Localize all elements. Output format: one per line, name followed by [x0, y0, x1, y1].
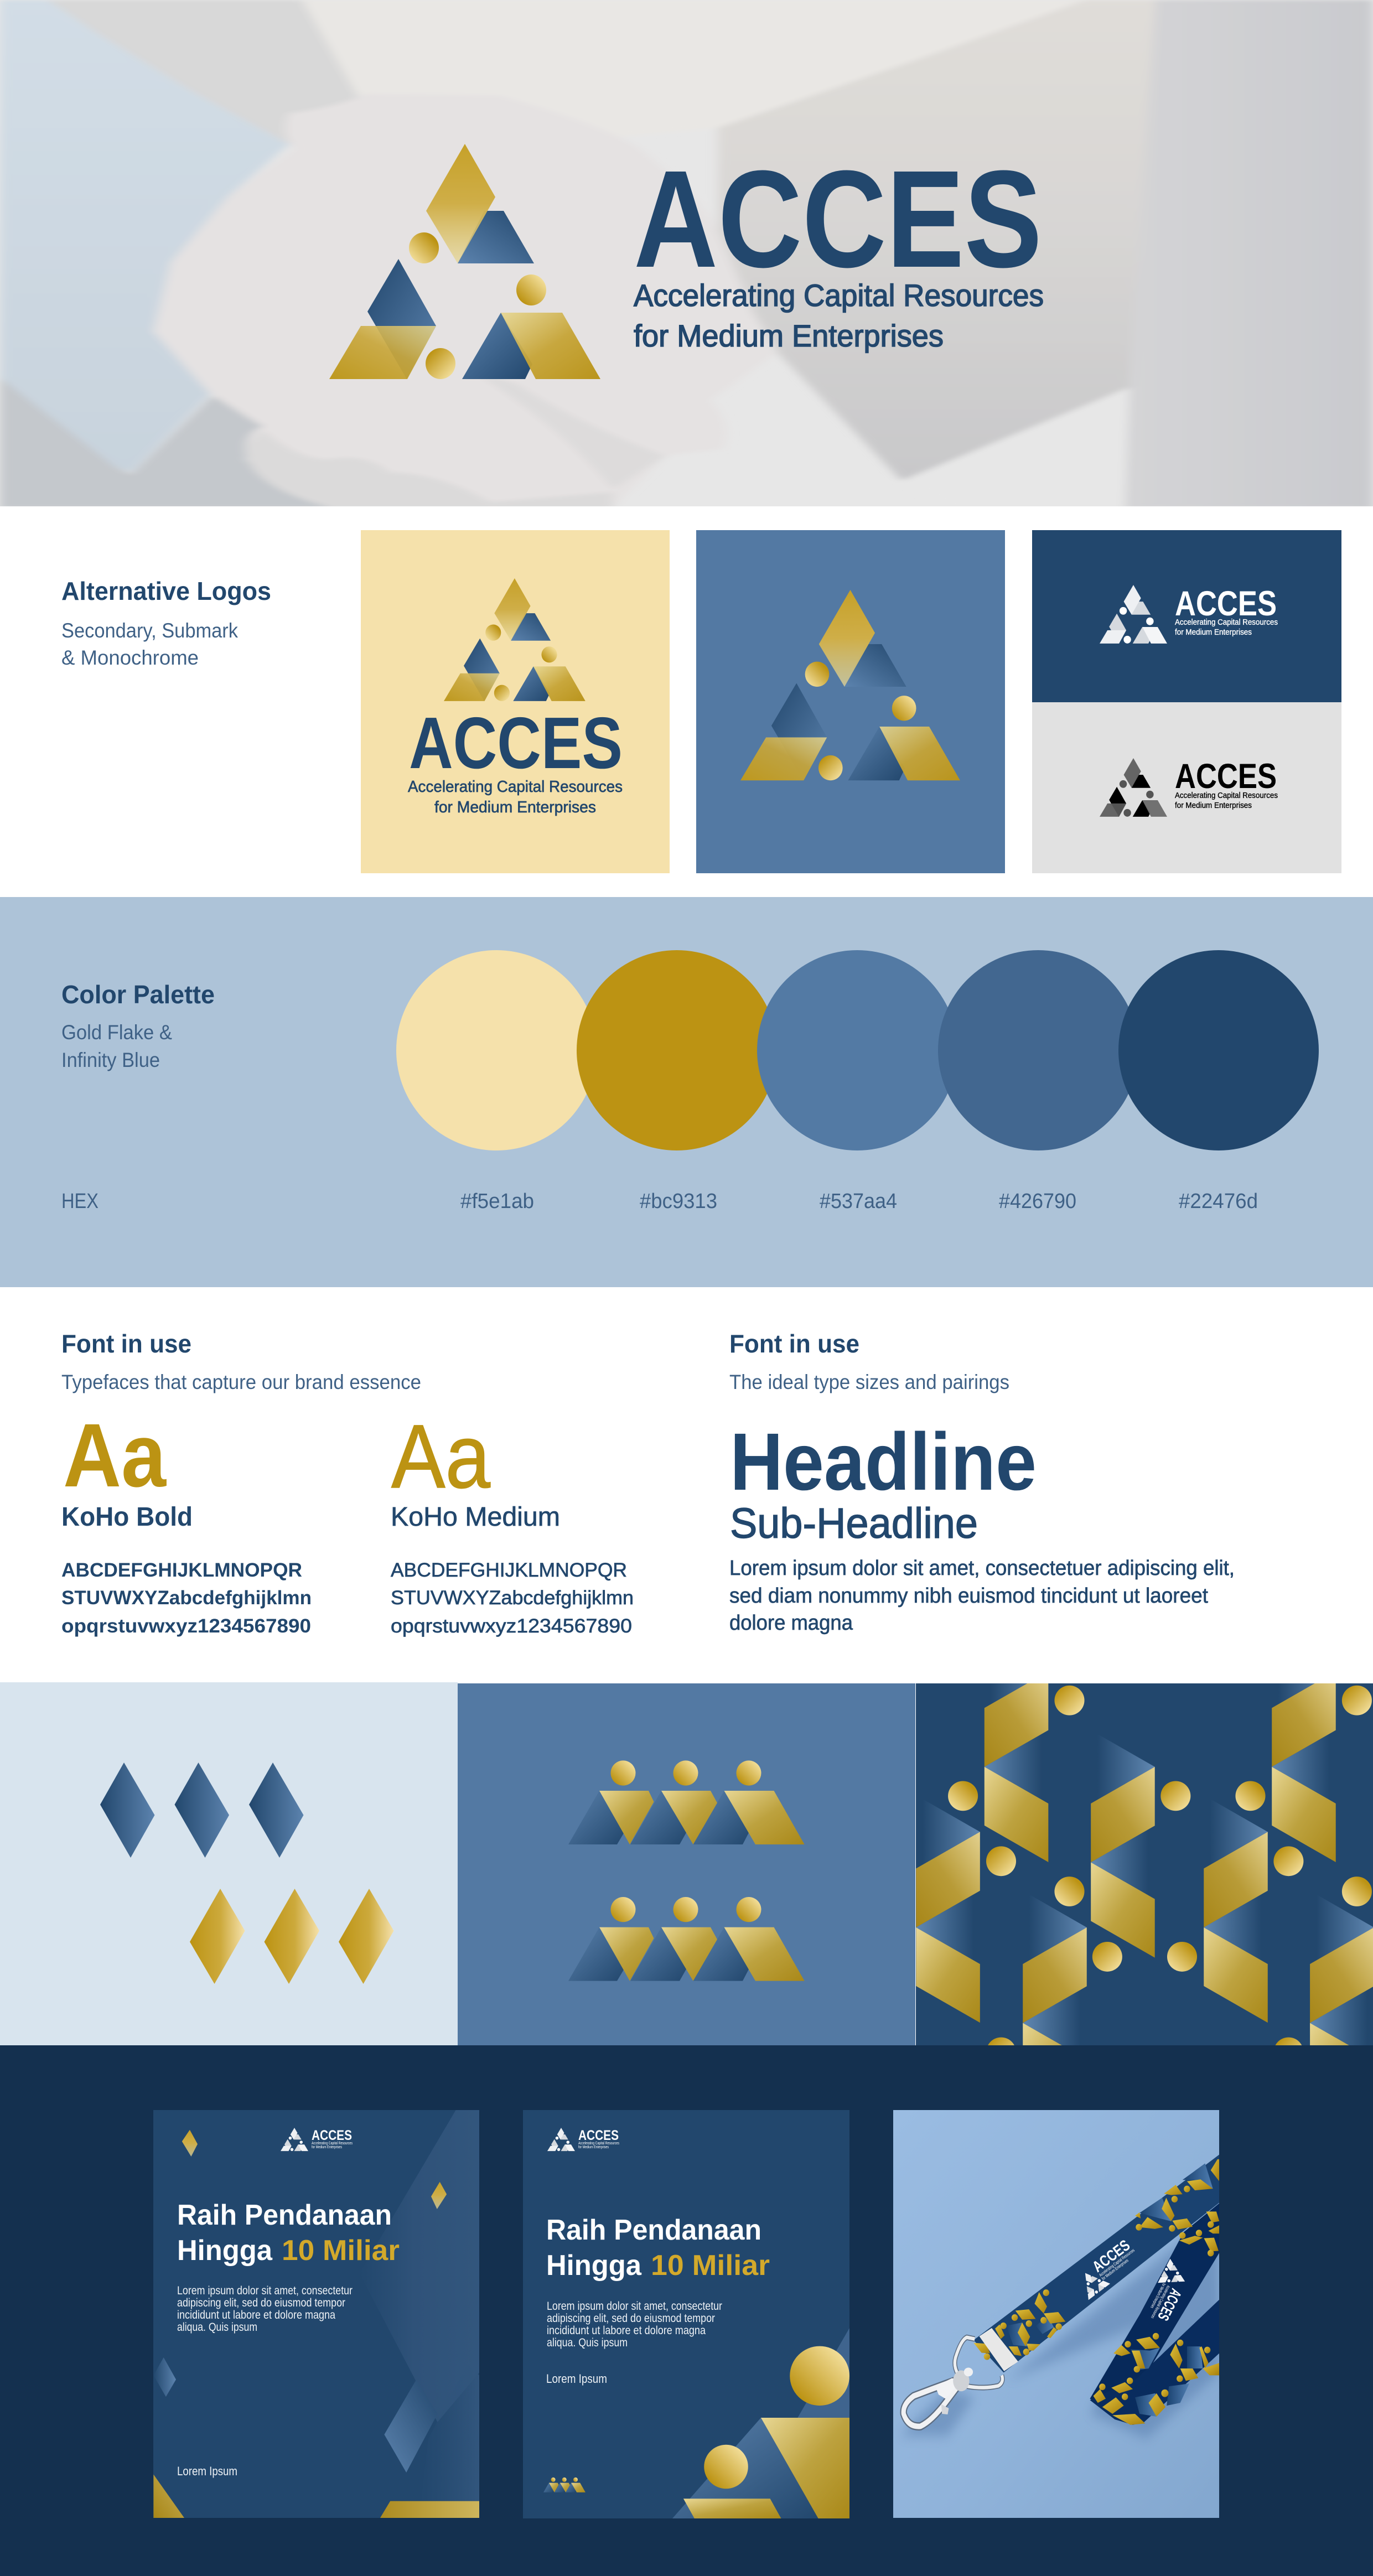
poster 2 motif [543, 2477, 586, 2492]
section heading: alternative logos: & Monochrome [61, 646, 199, 669]
poster 2 body: aliqua. Quis ipsum [547, 2336, 628, 2349]
specimen: KoHo Medium: opqrstuvwxyz1234567890 [391, 1615, 632, 1637]
section heading: alternative logos: Secondary, Submark [61, 619, 238, 642]
panel: diamond pattern [0, 1682, 458, 2045]
panel: monochrome black on grey: for Medium Enterprises [1175, 801, 1252, 810]
panel: color palette [0, 897, 1373, 1287]
poster 2 body: Lorem ipsum dolor sit amet, consectetur [547, 2300, 722, 2313]
panel: monochrome white on navy: Accelerating Capital Resources [1175, 618, 1278, 627]
hex values: #f5e1ab [460, 1190, 534, 1213]
palette swatches [396, 950, 1319, 1150]
lanyard gold print [973, 2159, 1219, 2425]
type hierarchy sample: Sub-Headline [730, 1500, 978, 1547]
poster 2 logo: for Medium Enterprises [578, 2144, 609, 2149]
poster 1 logo: Accelerating Capital Resources [312, 2140, 353, 2145]
poster 1 body: incididunt ut labore et dolore magna [177, 2309, 335, 2321]
specimen: KoHo Medium: KoHo Medium [391, 1502, 560, 1532]
palette heading: Infinity Blue [61, 1049, 160, 1071]
hero banner [0, 0, 1373, 508]
panel: submark on blue [696, 530, 1005, 873]
poster 1 footer: Lorem Ipsum [177, 2464, 237, 2478]
specimen: KoHo Bold: ABCDEFGHIJKLMNOPQR [61, 1559, 302, 1581]
type hierarchy sample: dolore magna [729, 1611, 853, 1635]
hex values: #537aa4 [820, 1190, 897, 1213]
lanyard logo 2 [1142, 2259, 1196, 2326]
poster 1 [153, 2110, 479, 2518]
panel: primary logo on cream: ACCES [409, 702, 623, 784]
panel: primary logo on cream [361, 530, 670, 873]
panel: applications band [0, 2045, 1373, 2576]
panel: geometric pattern [916, 1683, 1373, 2045]
motif row 1 [568, 1760, 805, 1844]
logo wordmark: ACCES [634, 142, 1042, 296]
gold diamonds [190, 1889, 394, 1984]
poster 2 headline: Raih Pendanaan [546, 2214, 761, 2246]
section heading: alternative logos: Alternative Logos [61, 577, 271, 605]
hero handshake photo backdrop [0, 0, 1373, 508]
poster 2 logo [547, 2128, 619, 2151]
poster 2 logo: ACCES [578, 2128, 619, 2143]
specimen: KoHo Bold: opqrstuvwxyz1234567890 [61, 1615, 311, 1637]
specimen: KoHo Bold: STUVWXYZabcdefghijklmn [61, 1587, 312, 1609]
type hierarchy sample: Headline [730, 1417, 1037, 1507]
poster 1 logo [281, 2128, 353, 2151]
panel: monochrome white on navy: for Medium Enterprises [1175, 628, 1252, 637]
poster 2 [523, 2110, 849, 2518]
panel: primary logo on cream: for Medium Enterprises [434, 799, 596, 816]
poster 2 body: adipiscing elit, sed do eiusmod tempor [547, 2312, 715, 2325]
palette heading [61, 980, 215, 1071]
panel: people motif [458, 1683, 915, 2045]
section heading: alternative logos [61, 577, 271, 669]
lanyard logo 1: for Medium Enterprises [1101, 2258, 1130, 2281]
logo tagline: for Medium Enterprises [634, 318, 944, 353]
lanyard straps [973, 2154, 1219, 2425]
poster 2 headline: Hingga [546, 2250, 642, 2282]
panel: monochrome white on navy [1032, 530, 1341, 702]
metal clip band [980, 2328, 1018, 2371]
type hierarchy sample [729, 1417, 1235, 1635]
type sizes heading [729, 1329, 1009, 1393]
panel: primary logo on cream: Accelerating Capital Resources [408, 778, 623, 796]
poster 2 headline [546, 2214, 770, 2282]
lanyard logo 2: for Medium Enterprises [1149, 2282, 1167, 2309]
logo tagline [634, 278, 1044, 353]
lanyard mockup [893, 2110, 1219, 2518]
hex values: HEX [61, 1190, 99, 1213]
specimen: KoHo Bold: KoHo Bold [61, 1502, 193, 1532]
specimen: KoHo Medium [391, 1406, 634, 1637]
metal ring [955, 2337, 1002, 2388]
specimen: KoHo Bold: Aa [63, 1404, 167, 1506]
lanyard logo 2: Accelerating Capital Resources [1150, 2284, 1171, 2319]
lanyard shadow [900, 2213, 1219, 2439]
poster 1 logo: ACCES [312, 2128, 352, 2143]
lanyard blue print fades [1006, 2163, 1213, 2417]
poster 1 body: adipiscing elit, sed do eiusmod tempor [177, 2297, 345, 2309]
poster 1 headline: Hingga [177, 2235, 273, 2267]
type hierarchy sample: Lorem ipsum dolor sit amet, consectetuer adipiscing elit, [729, 1557, 1235, 1580]
type sizes heading: Font in use [729, 1329, 859, 1358]
palette heading: Gold Flake & [61, 1021, 172, 1044]
typeface heading: Font in use [61, 1329, 191, 1358]
hex values [61, 1190, 1258, 1213]
specimen: KoHo Medium: ABCDEFGHIJKLMNOPQR [391, 1559, 627, 1581]
hex values: #22476d [1179, 1190, 1258, 1213]
lanyard logo 1: Accelerating Capital Resources [1098, 2248, 1136, 2278]
poster 1 body: aliqua. Quis ipsum [177, 2321, 257, 2334]
poster 2 body [547, 2300, 722, 2349]
type hierarchy sample: sed diam nonummy nibh euismod tincidunt ut laoreet [729, 1584, 1208, 1608]
panel: typefaces [61, 1329, 1235, 1637]
poster 1 headline [177, 2199, 400, 2267]
poster 2 body: incididunt ut labore et dolore magna [547, 2324, 706, 2337]
lanyard logo 2: ACCES [1154, 2286, 1185, 2324]
lanyard logo 1: ACCES [1089, 2236, 1133, 2276]
poster 1 headline: 10 Miliar [282, 2235, 400, 2267]
blue diamonds [100, 1763, 303, 1858]
panel: monochrome white on navy: ACCES [1175, 584, 1277, 623]
poster 2 logo: Accelerating Capital Resources [578, 2140, 619, 2145]
panel: monochrome black on grey [1032, 702, 1341, 873]
palette heading: Color Palette [61, 980, 215, 1009]
lanyard logo 1 [1070, 2236, 1142, 2300]
typeface heading [61, 1329, 421, 1393]
poster 2 headline: 10 Miliar [651, 2250, 770, 2282]
specimen: KoHo Medium: STUVWXYZabcdefghijklmn [391, 1587, 634, 1609]
logo mark [329, 144, 600, 379]
type sizes heading: The ideal type sizes and pairings [729, 1371, 1009, 1393]
snap hook [904, 2367, 973, 2427]
hex values: #bc9313 [640, 1190, 717, 1213]
poster 1 logo: for Medium Enterprises [312, 2144, 342, 2149]
panel: monochrome black on grey: ACCES [1175, 757, 1277, 796]
logo tagline: Accelerating Capital Resources [634, 278, 1044, 313]
poster 1 headline: Raih Pendanaan [177, 2199, 392, 2231]
hex values: #426790 [999, 1190, 1076, 1213]
specimen: KoHo Medium: Aa [391, 1406, 490, 1507]
poster 2 footer: Lorem Ipsum [546, 2372, 607, 2386]
panel: monochrome black on grey: Accelerating Capital Resources [1175, 791, 1278, 800]
specimen: KoHo Bold [61, 1404, 312, 1637]
poster 1 body [177, 2284, 353, 2334]
motif row 2 [568, 1897, 805, 1981]
typeface heading: Typefaces that capture our brand essence [61, 1371, 421, 1393]
poster 1 body: Lorem ipsum dolor sit amet, consectetur [177, 2284, 353, 2297]
